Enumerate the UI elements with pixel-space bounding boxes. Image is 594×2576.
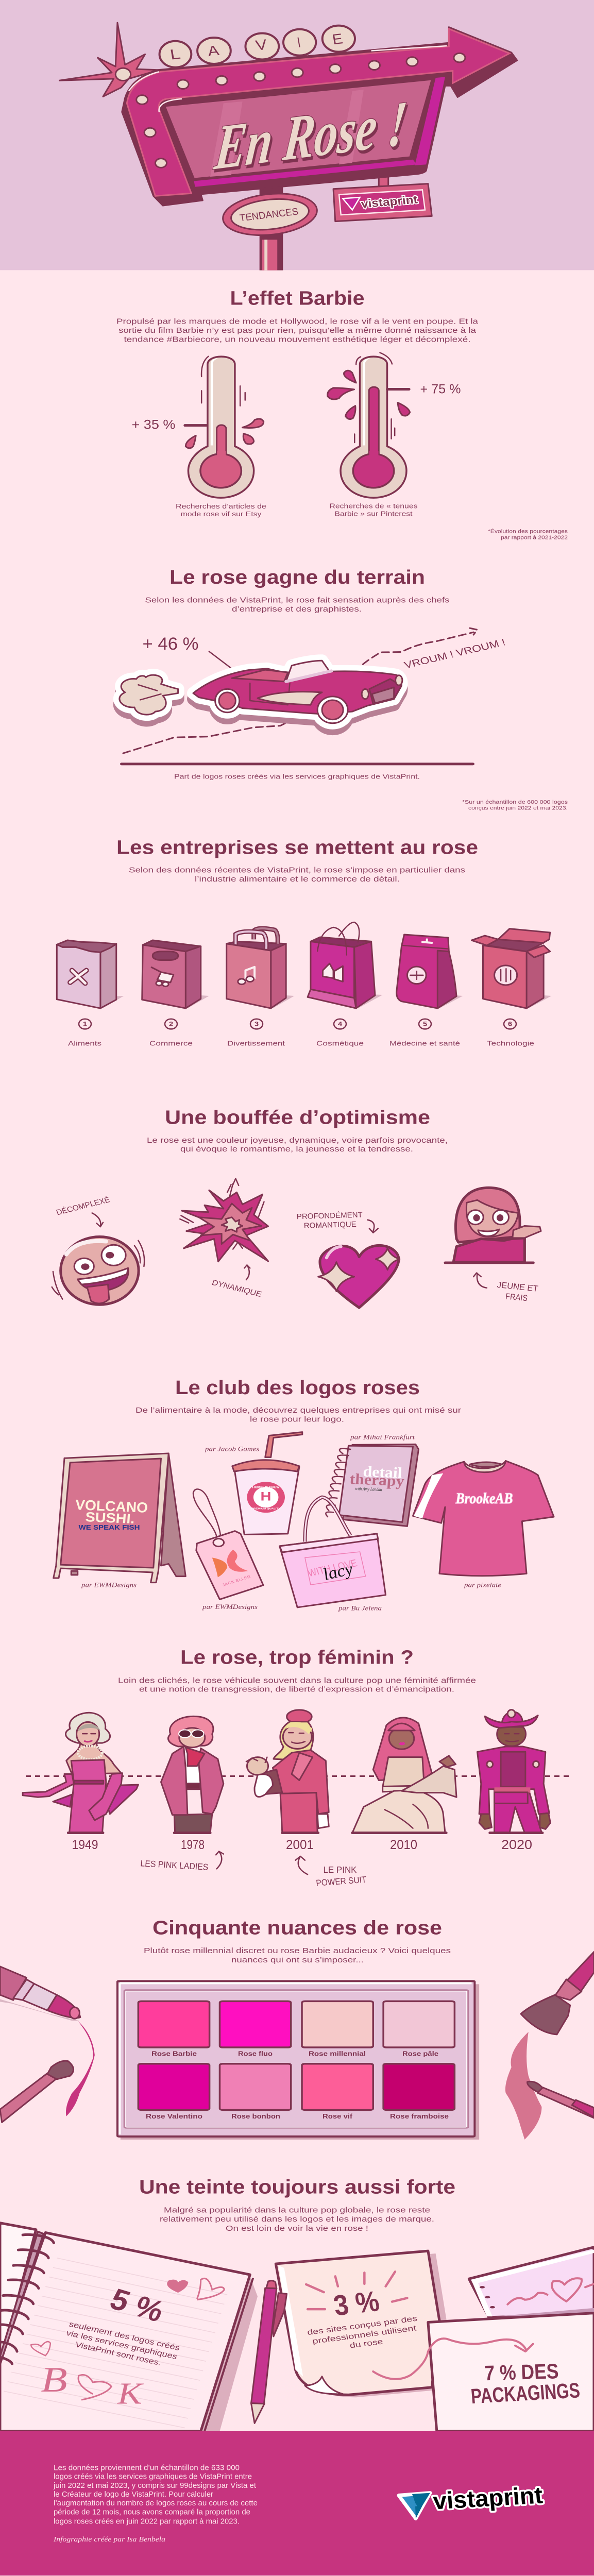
logo: Detail Therapy [349,1463,405,1494]
panel: l'effet Barbie [116,287,568,540]
bag labels: Divertissement [227,1040,285,1047]
methodology text: le Créateur de logo de VistaPrint. Pour calculer [54,2490,214,2499]
icon: waving woman [445,1188,541,1288]
panel: bouffée d'optimisme [52,1107,541,1308]
icon: heart [318,1220,400,1308]
logo: With love Lacy: WITH LOVE [306,1557,359,1579]
annotation labels: LE PINK [323,1866,357,1875]
years: 2020 [501,1838,532,1852]
stat: 3 %: du rose [349,2337,384,2350]
designer credits: par Mihai Frankfurt [350,1434,415,1441]
panel: cinquante nuances [0,1917,594,2140]
footnote: *Évolution des pourcentages [488,529,568,534]
intro text [118,1677,476,1693]
bag labels: Médecine et santé [389,1040,460,1047]
captions: Barbie » sur Pinterest [335,511,413,518]
bag labels: Technologie [487,1040,534,1047]
intro text: le rose pour leur logo. [250,1416,344,1423]
panel: club des logos roses [54,1377,554,1612]
logo: Detail Therapy: detail [363,1463,403,1482]
figure: 1949 [23,1713,138,1833]
illustration: palette and makeup [0,1952,594,2140]
handwritten labels: DYNAMIQUE [211,1278,263,1299]
arrows [216,1851,308,1874]
marker numbers: 4 [338,1021,343,1027]
stat: 5 %: seulement des logos créés [68,2320,181,2352]
doodle: initials: K [117,2377,144,2411]
numbered markers [79,1019,516,1029]
handwritten labels: ROMANTIQUE [303,1220,357,1230]
stroke: rose swatch [505,2032,541,2140]
intro text [160,2207,434,2232]
intro text: nuances qui ont su s’imposer... [231,1956,364,1964]
baseline rule [120,762,474,765]
logo: Jack Eller: JACK ELLER [222,1574,251,1587]
intro text [147,1137,448,1154]
intro text: Le rose est une couleur joyeuse, dynamique, voire parfois provocante, [147,1137,448,1144]
bulb letters: A [207,42,220,60]
logo: Detail Therapy: with Amy Landau [355,1486,382,1493]
credit: Infographie créée par Isa Benbela [53,2535,165,2543]
captions [176,503,417,518]
methodology text: l’augmentation du nombre de logos roses au cours de cette [54,2500,258,2507]
logo: Volcano Sushi: SUSHI. [85,1510,135,1527]
footnote [488,529,568,540]
bag 2: retail [142,940,209,1008]
stat: 5 %: 5 % [105,2282,169,2328]
illustrations: five figures [23,1710,550,1874]
handwritten labels: JEUNE ET [497,1280,539,1293]
intro text [129,867,465,884]
panel: les entreprises [57,836,552,1047]
intro text: sortie du film Barbie n’y est pas pour rien, puisqu’elle a même donné naissance à la [118,327,476,335]
handwritten labels [55,1195,539,1303]
heading: Le rose, trop féminin ? [180,1647,414,1668]
footnote: *Sur un échantillon de 600 000 logos [462,800,568,805]
bag 5: health [397,935,463,1008]
years [72,1838,532,1852]
captions: mode rose vif sur Etsy [180,511,262,518]
annotation labels [140,1859,367,1888]
methodology text: juin 2022 et mai 2023, y compris sur 99designs par Vista et [53,2482,257,2489]
icon: thin brush [527,2081,594,2118]
logo: Hibiscus Brew [251,1486,280,1510]
intro text [135,1406,462,1423]
stat: 3 %: professionnels utilisent [312,2324,417,2346]
years: 1978 [181,1838,205,1852]
palette [117,1981,479,2140]
illustration: neon arrow sign [59,23,517,270]
marker numbers [83,1021,513,1027]
doodle: initials [41,2360,144,2411]
heading: Cinquante nuances de rose [152,1917,442,1938]
bag labels: Aliments [68,1040,101,1047]
years: 2010 [390,1838,417,1852]
swatch labels: Rose Barbie [151,2050,197,2058]
stat: 3 %: des sites conçus par des [307,2314,418,2337]
bag 1: food [57,940,124,1008]
stat: 5 %: via les services graphiques [65,2329,178,2361]
stat: 3 %: 3 % [331,2285,382,2322]
designer credits: par Bu Jelena [338,1605,382,1612]
swatch labels: Rose vif [323,2113,352,2120]
bag 3: entertainment [227,928,294,1008]
logo: BrookeAB: BrookeAB [455,1490,513,1507]
logo: With love Lacy: lacy [320,1559,355,1584]
icon: burst [180,1179,268,1280]
purple sheet [469,2247,594,2317]
logo: Hibiscus Brew: PREMIUM QUALITY [251,1507,280,1510]
value: +75 %: + 75 % [420,382,461,397]
bulb letters: E [331,30,344,47]
intro text: Malgré sa popularité dans la culture pop globale, le rose reste [164,2207,430,2214]
illustration: six bags [57,922,552,1008]
icon: lipstick [0,1967,80,2021]
icon: small brush [0,2061,74,2122]
swatch labels: Rose fluo [238,2050,273,2058]
intro text: et une notion de transgression, de liberté d’expression et d’émancipation. [139,1686,454,1693]
paper sheet [276,2251,447,2397]
item: tote bag [280,1497,386,1607]
illustrations: merchandise [54,1432,554,1607]
intro text: relativement peu utilisé dans les logos et les images de marque. [160,2215,434,2223]
panel: le rose, trop féminin [23,1647,570,1888]
figure: 2020 [477,1710,550,1833]
annotation labels: POWER SUIT [316,1875,367,1888]
bulb letters: I [296,34,302,50]
marker numbers: 2 [169,1021,174,1027]
bulb letters: L [169,46,182,63]
swatch labels: Rose pâle [402,2050,438,2058]
swatch labels: Rose Valentino [146,2113,202,2120]
emoji: tongue out [52,1213,144,1304]
intro text: Plutôt rose millennial discret ou rose Barbie audacieux ? Voici quelques [144,1947,451,1955]
logo: vistaprint on sign: vistaprint [361,194,418,211]
heading: Une teinte toujours aussi forte [139,2176,455,2197]
bag 6: technology [471,929,552,1008]
item: notebook [326,1444,419,1526]
title: En Rose: En Rose ! [212,87,410,183]
captions: Recherches de « tenues [330,503,417,510]
methodology text: période de 12 mois, nous avons comparé la proportion de [54,2509,250,2516]
logo: vistaprint [399,2482,544,2519]
intro text: Selon des données récentes de VistaPrint, le rose s’impose en particulier dans [129,867,465,874]
item: hang tag [193,1489,263,1599]
stat: 7 % [470,2359,581,2408]
footnote [462,800,568,811]
value: +35 %: + 35 % [132,417,176,432]
methodology text: Les données proviennent d’un échantillon de 633 000 [54,2464,240,2472]
swatch labels [146,2050,449,2120]
logo: vistaprint: vistaprint [432,2482,544,2514]
stat: 7 %: 7 % DES [484,2359,559,2385]
marker numbers: 5 [423,1021,428,1027]
annotation labels: LES PINK LADIES [140,1859,209,1872]
intro text [144,1947,451,1964]
figure: 2010 [352,1718,456,1833]
stat: 3 % [307,2285,418,2350]
intro text: Loin des clichés, le rose véhicule souvent dans la culture pop une féminité affirmée [118,1677,476,1685]
methodology text [53,2464,258,2526]
marker numbers: 6 [508,1021,513,1027]
icon: large brush [521,1952,594,2035]
footnote: conçus entre juin 2022 et mai 2023. [468,805,568,811]
intro text [116,318,478,344]
handwritten labels: DÉCOMPLEXÉ [55,1195,111,1217]
badge: tendances: TENDANCES [239,206,299,224]
bag labels: Commerce [149,1040,193,1047]
intro text: Propulsé par les marques de mode et Hollywood, le rose vif a le vent en poupe. Et la [116,318,478,326]
figure: 1978 [161,1716,224,1833]
logo: Detail Therapy: therapy [349,1471,405,1490]
bag labels [68,1040,534,1047]
heading: Les entreprises se mettent au rose [116,836,478,858]
heading: Le rose gagne du terrain [169,566,425,588]
years: 2001 [286,1838,314,1852]
intro text: De l’alimentaire à la mode, découvrez quelques entreprises qui ont misé sur [135,1406,462,1415]
logo: Volcano Sushi [75,1497,148,1532]
logo: Hibiscus Brew: HIBISCUS BREW [252,1486,280,1489]
methodology text: logos roses créés en juin 2022 par rapport à mai 2023. [54,2518,240,2526]
stroke: magenta swatch [66,2021,95,2116]
bulb letters [169,30,344,63]
caption: Part de logos roses créés via les services graphiques de VistaPrint. [174,773,420,781]
swatch labels: Rose millennial [309,2050,366,2058]
intro text: On est loin de voir la vie en rose ! [226,2225,368,2232]
bag labels: Cosmétique [316,1040,364,1047]
notebook [0,2223,258,2431]
bag 4: cosmetics [308,922,383,1008]
value: +46 %: + 46 % [142,634,198,654]
footnote: par rapport à 2021-2022 [501,535,568,540]
intro text [145,597,450,614]
illustration: stationery [0,2223,594,2431]
figure: 2001 [246,1710,329,1833]
heading: L’effet Barbie [230,287,364,309]
handwritten labels: FRAIS [505,1291,528,1303]
logo: Volcano Sushi: WE SPEAK FISH [79,1524,140,1532]
swatch labels: Rose bonbon [231,2113,280,2120]
captions: Recherches d’articles de [176,503,266,511]
handwritten labels: PROFONDÉMENT [296,1210,363,1221]
designer credits [81,1434,502,1612]
illustration: pink convertible [120,628,477,753]
logo: Hibiscus Brew: H [261,1489,271,1503]
item: cup [232,1432,302,1535]
stat: 5 %: VistaPrint sont roses. [74,2341,162,2367]
marker numbers: 1 [83,1021,88,1027]
panel: une teinte toujours aussi forte [0,2176,594,2431]
logo: With love Lacy [306,1557,361,1587]
item: t-shirt [413,1461,554,1576]
illustrations: emoji set [52,1179,541,1308]
heading: Une bouffée d’optimisme [165,1107,430,1128]
designer credits: par pixelate [464,1582,502,1589]
designer credits: par EWMDesigns [202,1603,258,1611]
years: 1949 [72,1838,98,1852]
timeline dashed line [26,1775,570,1777]
badge: tendances [219,189,320,240]
methodology text: logos créés via les services graphiques de VistaPrint entre [54,2473,252,2481]
bulb letters: V [254,36,268,54]
heading: Le club des logos roses [175,1377,420,1398]
packaging sheet [373,2313,594,2431]
label: vroum: VROUM ! VROUM ! [403,637,507,671]
item: A-frame sign [54,1453,185,1583]
intro text: tendance #Barbiecore, un nouveau mouvement esthétique léger et décomplexé. [124,336,470,344]
intro text: Selon les données de VistaPrint, le rose fait sensation auprès des chefs [145,597,450,604]
chart: two thermometers [185,353,410,498]
designer credits: par EWMDesigns [81,1582,137,1589]
panel: hero sign [0,0,594,270]
intro text: qui évoque le romantisme, la jeunesse et la tendresse. [180,1145,413,1154]
swatch labels: Rose framboise [390,2113,449,2120]
logo: Volcano Sushi: VOLCANO [75,1497,148,1516]
stat: 5 % [65,2282,181,2367]
panel: le rose gagne du terrain [120,566,568,811]
designer credits: par Jacob Gomes [205,1446,259,1453]
panel: footer [0,2431,594,2575]
pen [251,2281,287,2423]
doodle: initials: B [41,2360,67,2399]
marker numbers: 3 [254,1021,259,1027]
intro text: d’entreprise et des graphistes. [232,605,362,614]
intro text: l’industrie alimentaire et le commerce de détail. [195,875,400,884]
